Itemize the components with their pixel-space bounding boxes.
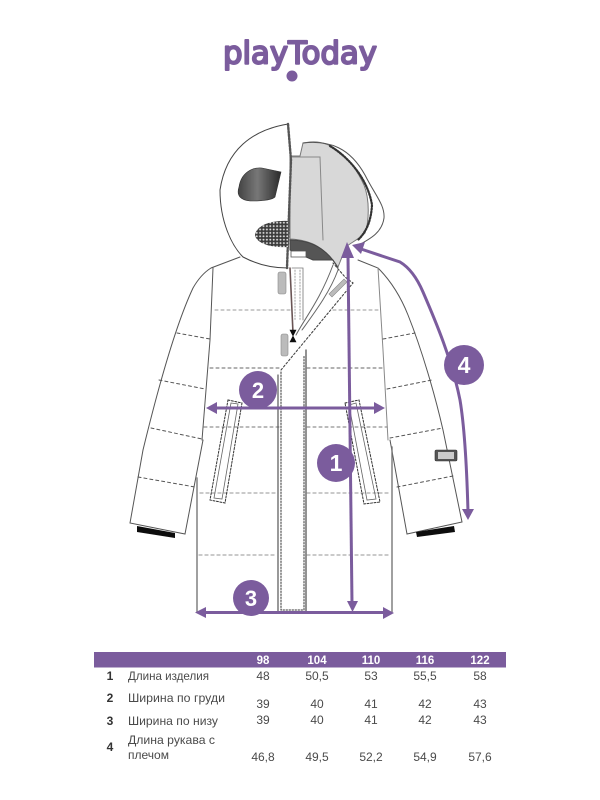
- black cuffs: [137, 526, 455, 538]
- row 4: Длина рукава с: [128, 733, 215, 747]
- measure 2: chest arrow: 2: [252, 378, 264, 403]
- row 3: 3: [107, 714, 114, 728]
- row 1: 55,5: [413, 669, 437, 683]
- sleeve tab: [435, 450, 457, 461]
- table header: 122: [470, 655, 490, 667]
- row 1: 48: [256, 669, 270, 683]
- row 3: 42: [418, 713, 432, 727]
- row 3: 41: [364, 713, 378, 727]
- row 2: [107, 691, 487, 711]
- quilting seams: [138, 310, 453, 555]
- measure 4: sleeve arrow: 4: [458, 352, 471, 378]
- row 3: Ширина по низу: [128, 714, 218, 728]
- measure 1: length arrow: [317, 242, 358, 612]
- row 1: [107, 669, 487, 683]
- body outline: [130, 257, 462, 612]
- size table: [94, 652, 506, 764]
- row 3: 39: [256, 713, 270, 727]
- table header: 104: [307, 655, 327, 667]
- row 1: 53: [364, 669, 378, 683]
- row 2: 39: [256, 697, 270, 711]
- row 4: 46,8: [251, 750, 275, 764]
- row 2: 41: [364, 697, 378, 711]
- row 4: 54,9: [413, 750, 437, 764]
- row 4: [107, 733, 492, 764]
- measure 3: hem arrow: 3: [245, 586, 257, 611]
- row 1: Длина изделия: [128, 669, 209, 683]
- measure 3: hem arrow: [195, 580, 394, 619]
- row 3: 40: [310, 713, 324, 727]
- jacket drawing: [130, 124, 462, 612]
- logo: playToday: [223, 36, 377, 72]
- row 4: 57,6: [468, 750, 492, 764]
- table header: 98: [257, 655, 270, 667]
- row 4: 4: [107, 740, 114, 754]
- row 2: 42: [418, 697, 432, 711]
- front placket: [278, 263, 353, 612]
- row 4: плечом: [128, 748, 169, 762]
- row 1: 1: [107, 669, 114, 683]
- row 2: 40: [310, 697, 324, 711]
- row 2: Ширина по груди: [128, 691, 225, 705]
- hood logo patch: [238, 168, 281, 201]
- hood left outer: [220, 124, 288, 268]
- row 2: 43: [473, 697, 487, 711]
- table header: 110: [362, 655, 380, 667]
- pockets: [210, 400, 380, 504]
- row 1: 58: [473, 669, 487, 683]
- measure 4: sleeve arrow: [352, 242, 484, 520]
- measure 2: chest arrow: [206, 371, 385, 414]
- row 3: [107, 713, 487, 728]
- table header: [94, 652, 506, 668]
- measure 1: length arrow: 1: [330, 450, 343, 476]
- row 2: 2: [107, 691, 114, 705]
- row 3: 43: [473, 713, 487, 727]
- row 4: 49,5: [305, 750, 329, 764]
- hood interior: [287, 124, 384, 268]
- row 1: 50,5: [305, 669, 329, 683]
- table header: 116: [416, 655, 434, 667]
- row 4: 52,2: [359, 750, 383, 764]
- grey tabs: [278, 272, 347, 356]
- hood dotted patch: [255, 221, 288, 247]
